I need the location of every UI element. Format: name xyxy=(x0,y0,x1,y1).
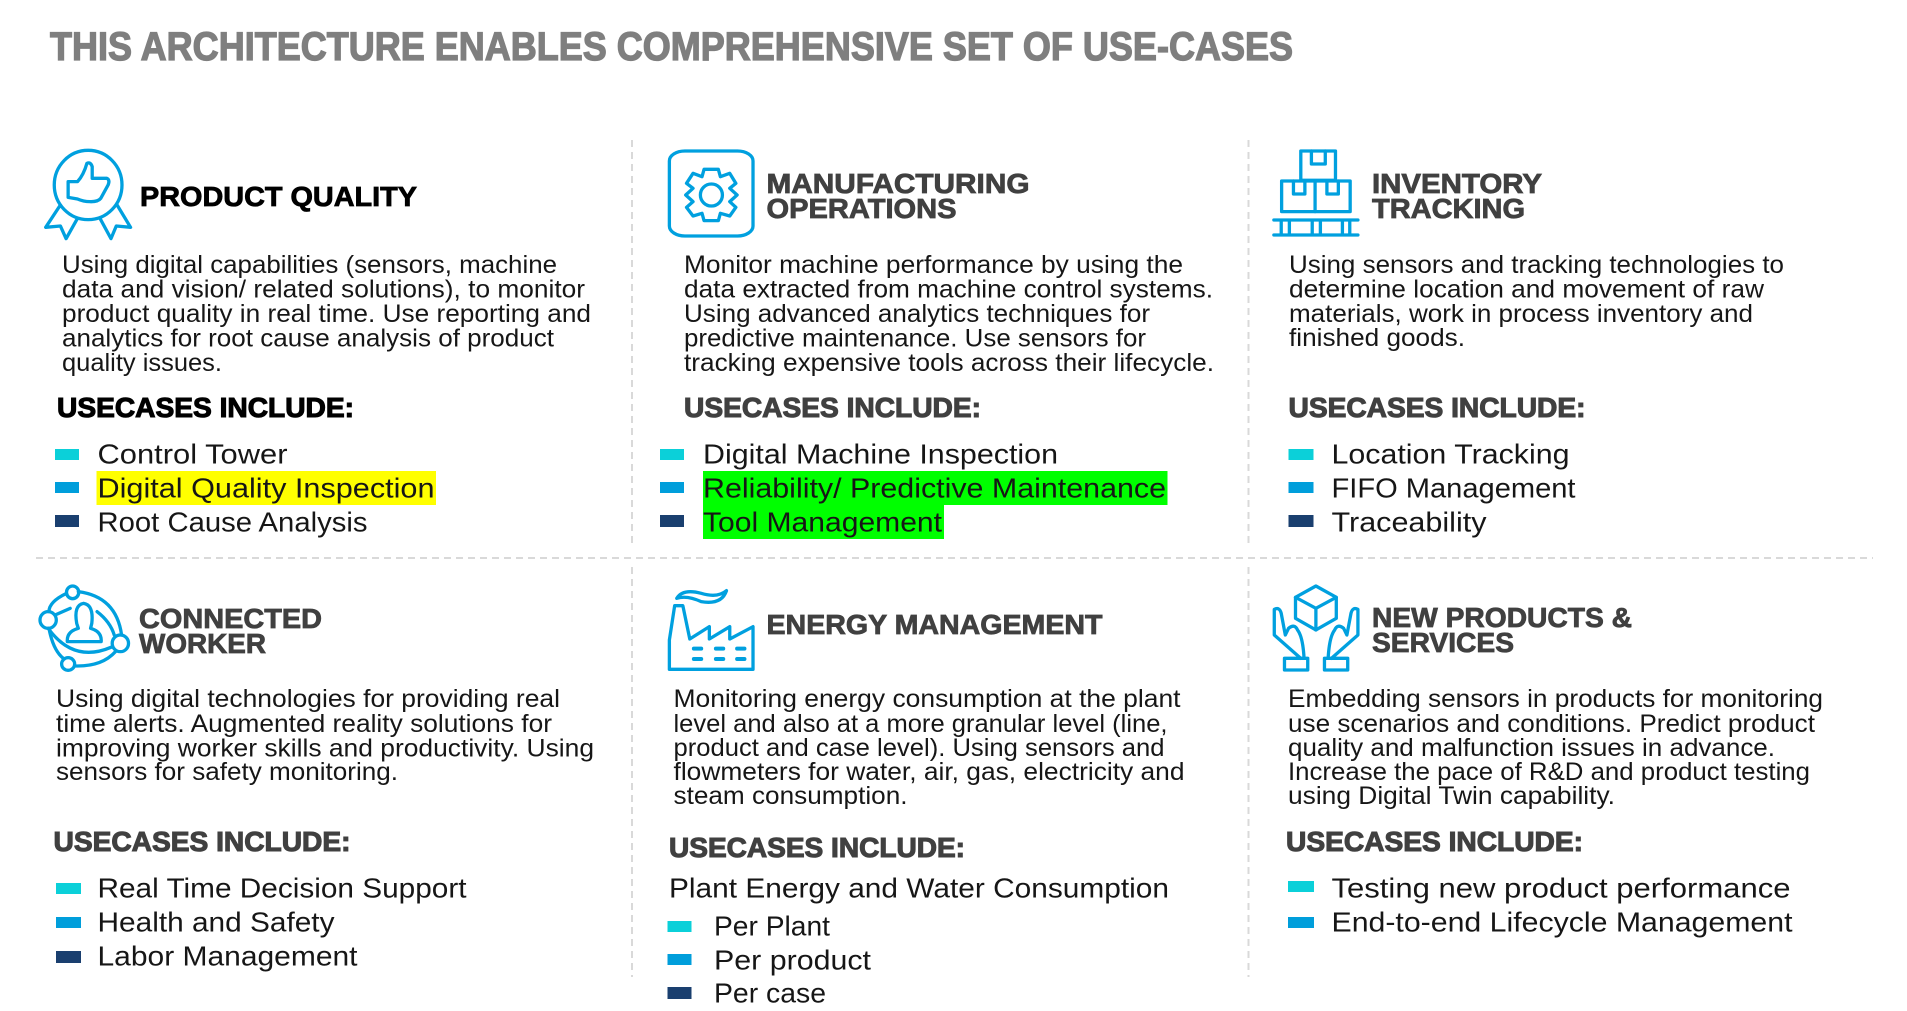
description: manufacturing operations: tracking expensive tools across their lifecycle. xyxy=(684,349,1214,377)
description: inventory tracking: materials, work in process inventory and xyxy=(1289,300,1753,328)
list: new product use cases: End-to-end Lifecycle Management xyxy=(1332,906,1793,938)
subheading: usecases include: USECASES INCLUDE: xyxy=(684,392,981,423)
description: manufacturing operations: Monitor machine performance by using the xyxy=(684,251,1183,279)
subheading: usecases include: USECASES INCLUDE: xyxy=(1288,392,1586,423)
description: product quality: analytics for root cause analysis of product xyxy=(62,324,554,352)
panel: connected worker xyxy=(40,586,594,972)
list: inventory use cases: Traceability xyxy=(1332,506,1486,538)
description: energy management: steam consumption. xyxy=(674,782,908,810)
list: energy use cases: Per Plant xyxy=(714,910,830,942)
list: connected worker use cases xyxy=(56,872,467,972)
description: connected worker: sensors for safety monitoring. xyxy=(56,758,398,786)
description: energy management xyxy=(674,685,1184,810)
description: manufacturing operations: Using advanced analytics techniques for xyxy=(684,300,1150,328)
description: new products and services: use scenarios and conditions. Predict product xyxy=(1288,710,1815,738)
title: THIS ARCHITECTURE ENABLES COMPREHENSIVE SET OF USE-CASES xyxy=(50,25,1293,69)
description: new products and services: Embedding sensors in products for monitoring xyxy=(1288,685,1823,713)
heading: manufacturing operations: OPERATIONS xyxy=(766,193,956,224)
list: inventory use cases xyxy=(1288,438,1576,538)
heading: energy management: ENERGY MANAGEMENT xyxy=(766,609,1102,640)
heading: inventory tracking xyxy=(1372,168,1542,224)
heading: new products and services: SERVICES xyxy=(1372,627,1514,658)
list: energy use cases: Per product xyxy=(714,944,871,976)
subheading: usecases include: USECASES INCLUDE: xyxy=(1286,826,1583,857)
description: manufacturing operations xyxy=(684,251,1214,377)
panel: inventory tracking xyxy=(1274,151,1784,538)
list: new product use cases: Testing new product performance xyxy=(1332,872,1790,904)
list: product quality use cases xyxy=(55,438,436,538)
description: new products and services xyxy=(1288,685,1823,810)
list: connected worker use cases: Labor Management xyxy=(98,940,358,972)
description: product quality: quality issues. xyxy=(62,349,222,377)
panel: manufacturing operations xyxy=(660,151,1214,539)
description: energy management: level and also at a more granular level (line, xyxy=(674,710,1168,738)
heading: connected worker: WORKER xyxy=(139,628,266,659)
heading: connected worker xyxy=(139,603,322,659)
list: inventory use cases: FIFO Management xyxy=(1332,472,1576,504)
heading: inventory tracking: INVENTORY xyxy=(1372,168,1542,199)
icon: connected worker network xyxy=(40,586,129,670)
panel: product quality xyxy=(46,150,591,538)
description: product quality: data and vision/ related solutions), to monitor xyxy=(62,276,585,304)
description: connected worker xyxy=(56,685,594,786)
panel: energy management xyxy=(668,591,1184,1008)
list: energy use cases xyxy=(668,910,871,1008)
description: new products and services: quality and malfunction issues in advance. xyxy=(1288,734,1775,762)
description: inventory tracking: Using sensors and tracking technologies to xyxy=(1289,251,1784,279)
list: connected worker use cases: Health and Safety xyxy=(98,906,334,938)
heading: new products and services: NEW PRODUCTS & xyxy=(1372,602,1632,633)
description: energy management: Monitoring energy consumption at the plant xyxy=(674,685,1181,713)
heading: manufacturing operations xyxy=(766,168,1030,224)
description: energy management: flowmeters for water, air, gas, electricity and xyxy=(674,758,1184,786)
description: product quality: product quality in real time. Use reporting and xyxy=(62,300,591,328)
heading: product quality: PRODUCT QUALITY xyxy=(140,181,417,212)
panel: new products and services xyxy=(1274,586,1823,938)
description: product quality xyxy=(62,251,591,377)
description: manufacturing operations: predictive maintenance. Use sensors for xyxy=(684,324,1146,352)
subheading: usecases include: USECASES INCLUDE: xyxy=(54,826,350,857)
text: plant energy and water consumption: Plant Energy and Water Consumption xyxy=(669,872,1169,904)
icon: factory with smoke xyxy=(669,591,753,669)
description: inventory tracking xyxy=(1289,251,1784,352)
description: inventory tracking: finished goods. xyxy=(1289,324,1465,352)
description: manufacturing operations: data extracted from machine control systems. xyxy=(684,276,1213,304)
list: product quality use cases: Control Tower xyxy=(98,438,288,470)
subheading: usecases include: USECASES INCLUDE: xyxy=(57,392,354,423)
list: product quality use cases: Root Cause Analysis xyxy=(98,506,368,538)
subheading: usecases include: USECASES INCLUDE: xyxy=(669,832,965,863)
description: connected worker: Using digital technologies for providing real xyxy=(56,685,560,713)
list: inventory use cases: Location Tracking xyxy=(1332,438,1570,470)
description: energy management: product and case level). Using sensors and xyxy=(674,734,1164,762)
description: new products and services: Increase the pace of R&D and product testing xyxy=(1288,758,1810,786)
heading: manufacturing operations: MANUFACTURING xyxy=(766,168,1030,199)
description: connected worker: time alerts. Augmented reality solutions for xyxy=(56,710,552,738)
list: manufacturing use cases: Reliability/ Predictive Maintenance xyxy=(703,472,1166,504)
list: new product use cases xyxy=(1288,872,1793,938)
list: connected worker use cases: Real Time Decision Support xyxy=(98,872,467,904)
description: product quality: Using digital capabilities (sensors, machine xyxy=(62,251,557,279)
heading: inventory tracking: TRACKING xyxy=(1372,193,1525,224)
description: connected worker: improving worker skills and productivity. Using xyxy=(56,734,594,762)
description: new products and services: using Digital Twin capability. xyxy=(1288,782,1615,810)
list: product quality use cases: Digital Quality Inspection xyxy=(98,472,435,504)
icon: gear in rounded square xyxy=(669,151,753,236)
list: energy use cases: Per case xyxy=(714,978,826,1008)
list: manufacturing use cases: Digital Machine Inspection xyxy=(703,438,1058,470)
heading: connected worker: CONNECTED xyxy=(139,603,322,634)
list: manufacturing use cases: Tool Management xyxy=(703,506,942,538)
icon: award ribbon with thumbs up xyxy=(46,150,131,239)
icon: hands holding a cube xyxy=(1274,586,1358,670)
heading: new products and services xyxy=(1372,602,1632,658)
description: inventory tracking: determine location and movement of raw xyxy=(1289,276,1765,304)
icon: stacked boxes on pallet xyxy=(1274,151,1358,235)
list: manufacturing use cases xyxy=(660,438,1168,539)
